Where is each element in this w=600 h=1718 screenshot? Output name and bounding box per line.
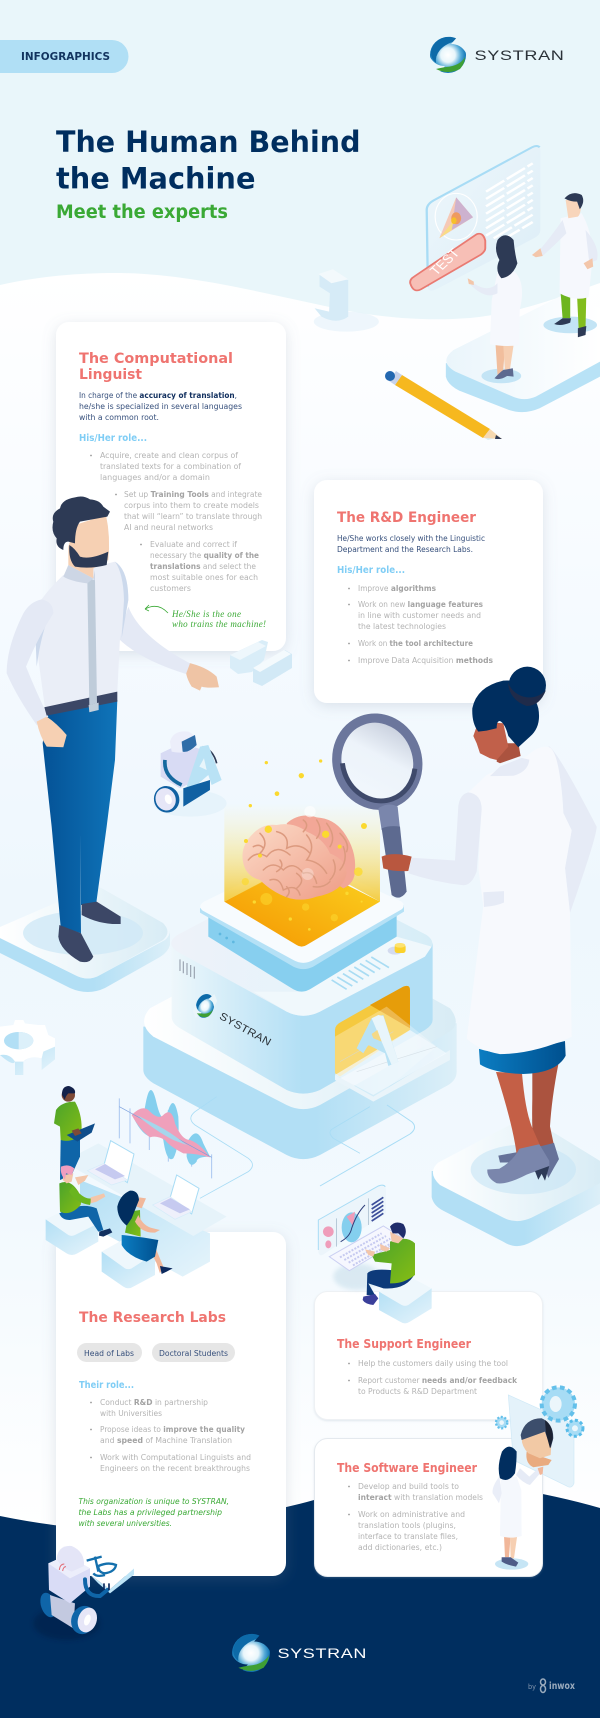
logo: Systran footer: SYSTRAN xyxy=(278,1645,367,1661)
role bullets: add dictionaries, etc.) xyxy=(358,1542,442,1552)
illustration: test scene with two scientists xyxy=(410,146,600,412)
role bullets xyxy=(348,583,493,665)
role bullets: Acquire, create and clean corpus of xyxy=(100,450,239,460)
rim xyxy=(200,860,404,969)
back shoe xyxy=(498,1143,559,1178)
subtitle: Meet the experts xyxy=(56,202,228,223)
role heading: His/Her role... xyxy=(337,565,405,576)
card intro: he/she is specialized in several languages xyxy=(79,401,242,411)
collar xyxy=(490,758,529,776)
card title line 2: Linguist xyxy=(79,367,142,383)
upper box xyxy=(208,915,397,992)
illustration: pipes xyxy=(191,1097,370,1198)
green note: the Labs has a privileged partnership xyxy=(78,1507,222,1517)
handwritten note: who trains the machine! xyxy=(172,619,266,629)
role bullets: Evaluate and correct if xyxy=(150,539,238,549)
logo: Systran header: SYSTRAN xyxy=(474,47,564,63)
handwritten note: He/She is the one xyxy=(171,609,241,619)
card title: The Research Labs xyxy=(79,1310,226,1326)
body lower xyxy=(50,1595,75,1628)
role bullets: Improve algorithms xyxy=(358,583,436,593)
illustration: gear left xyxy=(0,1020,55,1075)
hair xyxy=(472,680,539,747)
hologram panel xyxy=(508,1395,574,1487)
role bullets: most suitable ones for each xyxy=(150,572,258,582)
hologram head xyxy=(521,1418,553,1467)
illustration: robot carrying letter A xyxy=(150,731,227,817)
right wheel xyxy=(67,1603,99,1637)
card title: The R&D Engineer xyxy=(337,510,476,526)
illustration: research team xyxy=(46,1086,227,1288)
role bullets: customers xyxy=(150,583,191,593)
credit: by inwox: by xyxy=(528,1683,536,1691)
seated woman xyxy=(117,1191,173,1274)
trousers xyxy=(43,700,117,933)
conveyor xyxy=(335,1050,450,1102)
green note xyxy=(78,1496,229,1528)
role bullets: Work with Computational Linguists and xyxy=(100,1452,251,1462)
face xyxy=(68,515,109,578)
left stool xyxy=(46,1207,98,1255)
illustration: central machine xyxy=(143,707,457,1159)
platform under left man xyxy=(0,887,170,992)
letter N decoration xyxy=(230,640,292,686)
role bullets: Work on the tool architecture xyxy=(358,638,473,648)
standing person xyxy=(54,1086,95,1180)
coat xyxy=(467,747,572,1054)
illustration: bottom robot xyxy=(33,1540,134,1640)
arm left xyxy=(7,599,53,725)
role bullets: translated texts for a combination of xyxy=(100,461,242,471)
role heading: His/Her role... xyxy=(79,433,147,444)
card title: The Software Engineer xyxy=(337,1461,477,1475)
mid gear xyxy=(567,1420,583,1436)
credit: by inwox xyxy=(528,1679,575,1692)
collar xyxy=(63,565,95,583)
green note: This organization is unique to SYSTRAN, xyxy=(78,1496,229,1506)
front shoe xyxy=(487,1144,549,1183)
magnifier xyxy=(325,707,430,898)
woman xyxy=(493,1447,543,1570)
laptops xyxy=(87,1141,199,1219)
bottom plate top xyxy=(144,927,456,1109)
upper box lights xyxy=(220,934,233,942)
test button xyxy=(410,234,485,290)
card title: The Support Engineer xyxy=(337,1337,471,1351)
back sleeve xyxy=(548,746,597,913)
platform xyxy=(446,333,600,412)
role bullets: and speed of Machine Translation xyxy=(100,1435,232,1445)
role bullets: Conduct R&D in partnership xyxy=(100,1397,208,1407)
keyboard xyxy=(329,1226,403,1271)
table top xyxy=(63,1143,227,1236)
tag: infographics xyxy=(0,40,128,73)
small gear xyxy=(496,1417,507,1428)
card intro: Department and the Research Labs. xyxy=(337,544,473,554)
illustration: letter J xyxy=(314,269,379,332)
vents xyxy=(180,959,194,979)
role bullets: Develop and build tools to xyxy=(358,1481,459,1491)
left wheel xyxy=(37,1591,59,1619)
role bullets xyxy=(348,1481,483,1552)
illustration: left man xyxy=(7,497,219,962)
shadow xyxy=(333,1263,380,1290)
shadow xyxy=(33,1607,100,1640)
middle box side xyxy=(172,943,433,1094)
illustration: software engineer hologram xyxy=(493,1387,583,1570)
role heading: Their role... xyxy=(79,1380,134,1391)
front sleeve xyxy=(408,792,482,885)
front leg xyxy=(496,1072,540,1155)
hand right xyxy=(186,662,219,691)
role bullets xyxy=(348,1358,517,1396)
body xyxy=(48,1555,90,1603)
navy footer wave xyxy=(0,1483,600,1718)
neck xyxy=(497,743,521,763)
gripper xyxy=(104,1583,109,1590)
role bullets: to Products & R&D Department xyxy=(358,1386,478,1396)
shirt shade xyxy=(35,562,128,667)
tag: infographics: INFOGRAPHICS xyxy=(21,51,110,63)
card: computational linguist xyxy=(56,322,286,651)
role bullets xyxy=(90,1397,251,1473)
letter A xyxy=(357,1015,398,1066)
card intro: He/She works closely with the Linguistic xyxy=(337,533,485,543)
green note: with several universities. xyxy=(78,1518,172,1528)
card: research labs xyxy=(56,1232,286,1576)
knob xyxy=(388,943,406,955)
hand on hip xyxy=(37,717,67,747)
bun xyxy=(509,667,546,704)
arm xyxy=(85,1579,107,1596)
role bullets: languages and/or a domain xyxy=(100,472,210,482)
platform top xyxy=(446,293,600,399)
role bullets: Report customer needs and/or feedback xyxy=(358,1375,517,1385)
machine window xyxy=(335,986,437,1100)
illustration: support engineer at console xyxy=(318,1185,432,1323)
role bullets: in line with customer needs and xyxy=(358,610,481,620)
arm right xyxy=(118,607,190,674)
title xyxy=(56,125,360,196)
bottom plate side xyxy=(143,1023,457,1159)
floating particles xyxy=(242,759,367,931)
role bullets: interact with translation models xyxy=(358,1492,483,1502)
seated pink hair person xyxy=(59,1165,112,1237)
beard xyxy=(69,545,108,568)
gold floor xyxy=(224,862,380,947)
logo on box xyxy=(191,990,273,1049)
skirt xyxy=(479,1041,566,1074)
illustration: R&D woman xyxy=(408,667,597,1183)
pill: doctoral students: Doctoral Students xyxy=(159,1348,228,1358)
table base xyxy=(80,1180,210,1277)
role bullets: Propose ideas to improve the quality xyxy=(100,1424,246,1434)
role bullets: AI and neural networks xyxy=(124,522,213,532)
credit: by inwox: inwox xyxy=(549,1681,575,1692)
stool xyxy=(379,1275,432,1323)
hair band xyxy=(508,683,546,706)
right stool xyxy=(102,1237,155,1288)
paper top xyxy=(57,1540,134,1589)
card intro: with a common root. xyxy=(79,412,159,422)
shoes xyxy=(58,925,93,962)
card title: The Computational xyxy=(79,351,233,367)
glow walls xyxy=(224,803,380,902)
role bullets: the latest technologies xyxy=(358,621,446,631)
buckle xyxy=(89,703,99,712)
big gear xyxy=(542,1387,575,1421)
card: support engineer xyxy=(314,1292,542,1420)
card: software engineer xyxy=(314,1438,542,1576)
card: R&D engineer xyxy=(314,480,543,703)
placket xyxy=(87,578,97,705)
logo: Systran header xyxy=(427,34,564,76)
pill: head of labs: Head of Labs xyxy=(84,1348,134,1358)
role bullets: Improve Data Acquisition methods xyxy=(358,655,493,665)
middle box top xyxy=(171,870,432,1016)
role bullets: that will “learn” to translate through xyxy=(124,511,262,521)
role bullets: Engineers on the recent breakthroughs xyxy=(100,1463,250,1473)
role bullets xyxy=(90,450,262,593)
paper corner xyxy=(57,1540,134,1593)
white wave body background xyxy=(0,273,600,1530)
pocket xyxy=(483,891,504,907)
illustration: pencil xyxy=(385,371,502,440)
role bullets: Work on administrative and xyxy=(358,1509,465,1519)
handwritten note xyxy=(145,605,266,629)
back leg xyxy=(532,1064,558,1147)
shirt xyxy=(35,562,128,708)
role bullets: Set up Training Tools and integrate xyxy=(124,489,262,499)
pill: head of labs xyxy=(77,1343,142,1362)
top background xyxy=(0,0,600,340)
gauge xyxy=(59,1564,66,1571)
card intro: In charge of the accuracy of translation, xyxy=(79,390,237,400)
role bullets: necessary the quality of the xyxy=(150,550,259,560)
pill: doctoral students xyxy=(152,1343,235,1362)
data wave chart xyxy=(119,1090,212,1178)
logo: Systran footer xyxy=(229,1631,367,1675)
card intro xyxy=(337,533,485,554)
person xyxy=(363,1222,415,1305)
test button: TEST xyxy=(427,246,463,278)
card intro xyxy=(79,390,242,422)
role bullets: with Universities xyxy=(100,1408,162,1418)
hair xyxy=(53,497,110,550)
monitor xyxy=(427,146,540,291)
shoes back xyxy=(82,902,121,924)
role bullets: translations and select the xyxy=(150,561,256,571)
paper symbols xyxy=(87,1557,116,1576)
man scientist xyxy=(532,193,598,337)
title: the Machine xyxy=(56,162,256,196)
face xyxy=(473,722,508,760)
dome xyxy=(57,1546,84,1572)
role bullets: Help the customers daily using the tool xyxy=(358,1358,508,1368)
brain xyxy=(242,815,355,900)
role bullets: interface to translate files, xyxy=(358,1531,458,1541)
heel xyxy=(535,1166,549,1181)
illustration: pipes right xyxy=(320,1105,415,1186)
logo on box: SYSTRAN xyxy=(217,1010,273,1049)
role bullets: Work on new language features xyxy=(358,599,483,609)
role bullets: translation tools (plugins, xyxy=(358,1520,456,1530)
screen xyxy=(318,1185,386,1255)
platform under right woman xyxy=(432,1116,600,1246)
belt xyxy=(44,692,117,716)
title: The Human Behind xyxy=(56,125,360,159)
woman scientist xyxy=(468,235,522,383)
role bullets: corpus into them to create models xyxy=(124,500,259,510)
